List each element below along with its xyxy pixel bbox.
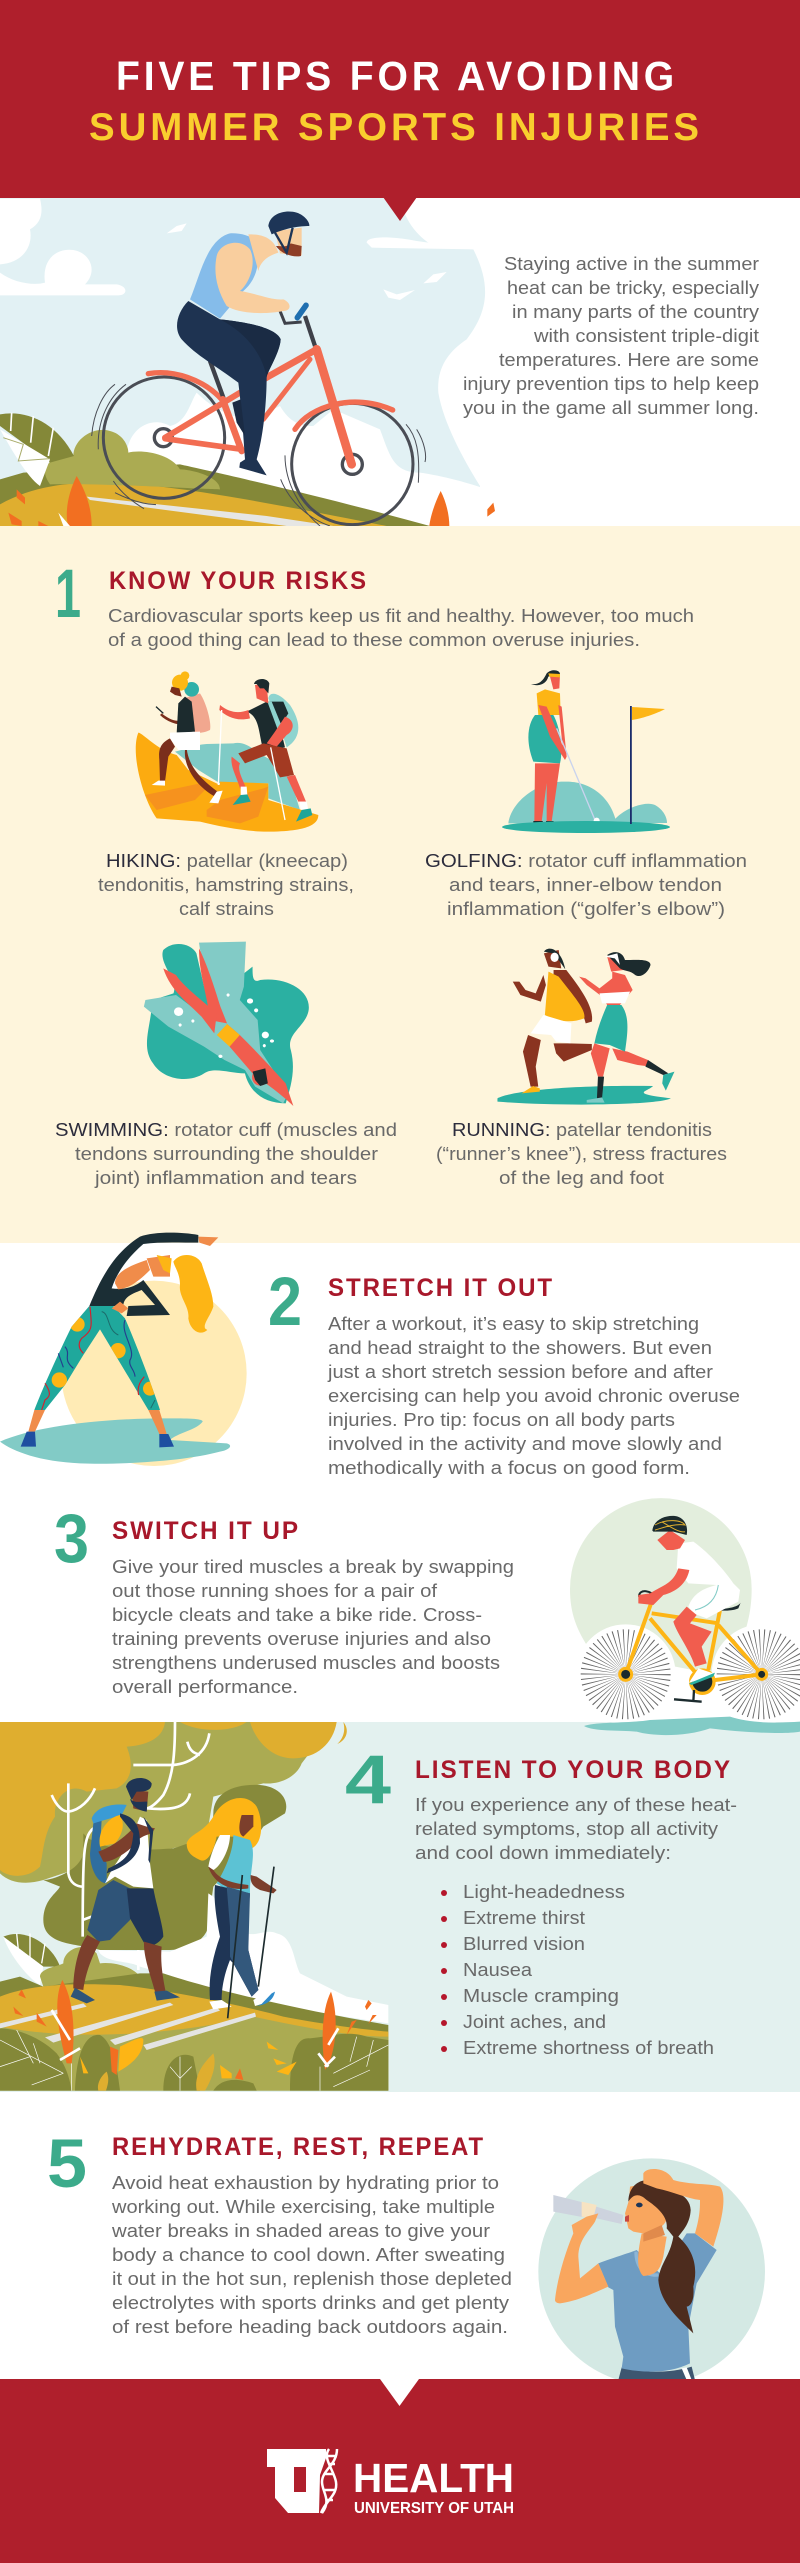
- text block: cross-training advice: strengthens underused muscles and boosts: [112, 1653, 500, 1673]
- text block: stretching advice: [327, 1314, 740, 1478]
- panel: tip 4 listen to your body: [0, 1722, 800, 2092]
- title: [89, 53, 703, 149]
- text block: swimming: tendons surrounding the shoulder: [75, 1144, 378, 1164]
- text block: heat symptoms intro: [415, 1795, 737, 1863]
- text block: heat symptoms intro: related symptoms, stop all activity: [415, 1819, 718, 1839]
- text block: running: [436, 1120, 727, 1188]
- text block: swimming: [55, 1120, 397, 1188]
- title: FIVE TIPS FOR AVOIDING: [116, 53, 678, 99]
- panel: footer: [0, 2379, 800, 2563]
- text block: hydration advice: water breaks in shaded areas to give your: [111, 2221, 490, 2241]
- list: symptoms: Blurred vision: [463, 1934, 585, 1954]
- number 5: 5: [47, 2125, 87, 2202]
- text block: heat symptoms intro: If you experience any of these heat-: [415, 1795, 737, 1815]
- text block: heat symptoms intro: and cool down immediately:: [415, 1843, 671, 1863]
- text block: running: (“runner’s knee”), stress fractures: [436, 1144, 727, 1164]
- panel: tip 1 know your risks: [0, 526, 800, 1243]
- number 3: 3: [54, 1500, 89, 1577]
- number 1: 1: [55, 555, 81, 632]
- heading: know your risks: KNOW YOUR RISKS: [109, 567, 368, 595]
- text block: intro paragraph: temperatures. Here are some: [499, 350, 759, 370]
- title: SUMMER SPORTS INJURIES: [89, 106, 703, 149]
- text block: hydration advice: Avoid heat exhaustion by hydrating prior to: [112, 2173, 499, 2193]
- illustration: cyclist with spoked wheels: [570, 1498, 800, 1735]
- illustration: swimmer: [144, 942, 309, 1106]
- text block: hydration advice: body a chance to cool down. After sweating: [112, 2245, 505, 2265]
- text block: hiking: HIKING: patellar (kneecap): [106, 851, 348, 871]
- text block: running: of the leg and foot: [499, 1168, 664, 1188]
- list: symptoms: Nausea: [463, 1960, 533, 1980]
- text block: hiking: calf strains: [179, 899, 274, 919]
- list: symptoms: Muscle cramping: [463, 1986, 619, 2006]
- text block: risks intro: [108, 606, 694, 650]
- text block: intro paragraph: Staying active in the summer: [504, 254, 759, 274]
- text block: cross-training advice: out those running shoes for a pair of: [112, 1581, 438, 1601]
- text block: running: RUNNING: patellar tendonitis: [452, 1120, 712, 1140]
- text block: intro paragraph: heat can be tricky, especially: [507, 278, 759, 298]
- text block: stretching advice: methodically with a focus on good form.: [328, 1458, 690, 1478]
- illustration: runners: [497, 949, 674, 1105]
- illustration: woman stretching: [0, 1233, 247, 1466]
- text block: golfing: inflammation (“golfer’s elbow”): [447, 899, 725, 919]
- text block: golfing: GOLFING: rotator cuff inflammation: [425, 851, 747, 871]
- illustration: hikers: [136, 671, 318, 832]
- text block: hiking: [98, 851, 354, 919]
- text block: intro paragraph: [463, 254, 759, 418]
- text block: cross-training advice: [112, 1557, 514, 1697]
- text block: intro paragraph: you in the game all summer long.: [463, 398, 759, 418]
- panel: tip 2 stretch it out: [0, 1233, 740, 1478]
- text block: risks intro: of a good thing can lead to these common overuse injuries.: [108, 630, 640, 650]
- text block: cross-training advice: overall performance.: [112, 1677, 298, 1697]
- text block: intro paragraph: in many parts of the country: [512, 302, 759, 322]
- illustration: cyclist riding uphill: [0, 196, 510, 526]
- text block: hydration advice: working out. While exercising, take multiple: [111, 2197, 495, 2217]
- list: symptoms: [441, 1882, 714, 2058]
- text block: golfing: [425, 851, 747, 919]
- list: symptoms: Extreme shortness of breath: [463, 2038, 714, 2058]
- logo: University of Utah Health: [267, 2449, 514, 2517]
- text block: hydration advice: [111, 2173, 512, 2337]
- text block: hiking: tendonitis, hamstring strains,: [98, 875, 354, 895]
- icon: block U with DNA strand: [267, 2449, 337, 2513]
- text block: hydration advice: electrolytes with sports drinks and get plenty: [112, 2293, 509, 2313]
- text block: risks intro: Cardiovascular sports keep us fit and healthy. However, too much: [108, 606, 694, 626]
- heading: listen to your body: LISTEN TO YOUR BODY: [415, 1756, 732, 1784]
- list: symptoms: Extreme thirst: [463, 1908, 585, 1928]
- illustration: hikers on a trail: [0, 1722, 388, 2091]
- text block: stretching advice: exercising can help you avoid chronic overuse: [328, 1386, 740, 1406]
- panel: intro hero: [0, 196, 759, 526]
- list: symptoms: Light-headedness: [463, 1882, 625, 1902]
- text block: stretching advice: After a workout, it’s easy to skip stretching: [328, 1314, 699, 1334]
- wordmark: UNIVERSITY OF UTAH: [354, 2500, 514, 2517]
- text block: hydration advice: of rest before heading back outdoors again.: [112, 2317, 508, 2337]
- illustration: golfer: [502, 670, 670, 833]
- text block: intro paragraph: with consistent triple-digit: [533, 326, 759, 346]
- panel: tip 5 rehydrate rest repeat: [47, 2125, 765, 2385]
- text block: swimming: joint) inflammation and tears: [94, 1168, 357, 1188]
- number 2: 2: [268, 1263, 302, 1340]
- heading: switch it up: SWITCH IT UP: [112, 1517, 300, 1545]
- text block: golfing: and tears, inner-elbow tendon: [449, 875, 722, 895]
- panel: tip 3 switch it up: [54, 1498, 800, 1735]
- number 4: 4: [345, 1741, 391, 1818]
- text block: stretching advice: just a short stretch session before and after: [327, 1362, 713, 1382]
- wordmark: HEALTH: [353, 2455, 514, 2501]
- panel: header banner: [0, 0, 800, 221]
- text block: cross-training advice: Give your tired muscles a break by swapping: [112, 1557, 514, 1577]
- text block: cross-training advice: training prevents overuse injuries and also: [112, 1629, 491, 1649]
- heading: stretch it out: STRETCH IT OUT: [328, 1274, 554, 1302]
- text block: stretching advice: injuries. Pro tip: focus on all body parts: [328, 1410, 675, 1430]
- text block: swimming: SWIMMING: rotator cuff (muscles and: [55, 1120, 397, 1140]
- text block: stretching advice: and head straight to the showers. But even: [328, 1338, 712, 1358]
- list: symptoms: Joint aches, and: [463, 2012, 606, 2032]
- text block: cross-training advice: bicycle cleats and take a bike ride. Cross-: [112, 1605, 482, 1625]
- illustration: woman drinking water: [538, 2158, 765, 2385]
- text block: intro paragraph: injury prevention tips to help keep: [463, 374, 759, 394]
- text block: hydration advice: it out in the hot sun, replenish those depleted: [112, 2269, 512, 2289]
- heading: rehydrate rest repeat: REHYDRATE, REST, REPEAT: [112, 2133, 485, 2161]
- text block: stretching advice: involved in the activity and move slowly and: [328, 1434, 722, 1454]
